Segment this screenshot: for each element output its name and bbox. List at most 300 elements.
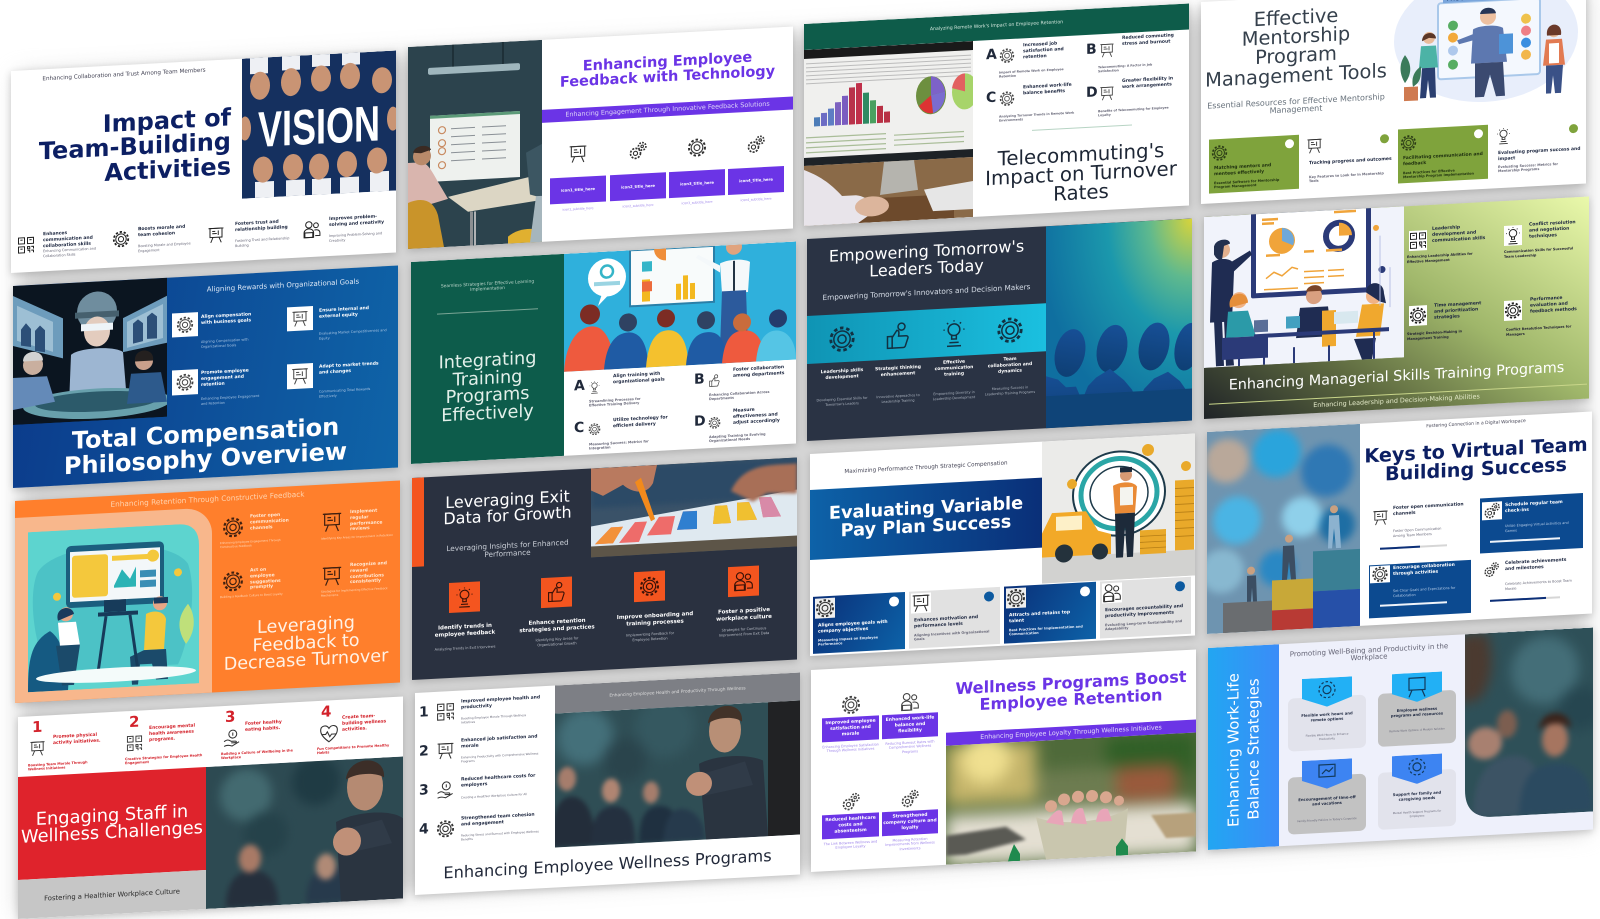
letter: C — [986, 90, 996, 106]
letter: B — [1086, 41, 1097, 58]
title: Impact of Team-Building Activities — [39, 103, 231, 187]
sub: Communication Skills for Successful Team Leadership — [1504, 246, 1573, 259]
sub: Adapting Training to Evolving Organizational Needs — [709, 432, 766, 444]
label box: Reduced healthcare costs and absenteeism — [825, 816, 876, 834]
photo: man pointing — [206, 756, 403, 909]
label box — [882, 809, 938, 836]
title: Leadership development and communication skills — [1432, 225, 1485, 243]
item 4 — [321, 560, 400, 601]
letter: C — [574, 420, 584, 436]
item text: Improves problem-solving and creativity — [329, 214, 384, 228]
icon — [588, 379, 601, 396]
left green panel — [411, 254, 564, 464]
label box: icon3_title_here — [680, 180, 714, 187]
subtitle: Aligning Rewards with Organizational Goals — [207, 278, 359, 294]
illustration: feedback on monitor — [28, 523, 199, 692]
benefit item: morale — [112, 224, 185, 248]
icon — [436, 741, 455, 761]
title: Effective communication training — [935, 360, 973, 377]
icon — [436, 780, 455, 800]
item 2 — [610, 142, 666, 209]
item 1 — [172, 312, 251, 349]
red title panel: Engaging Staff in Wellness Challenges — [21, 801, 203, 847]
title: Schedule regular team check-ins — [1505, 500, 1563, 514]
subtitle: Promoting Well-Being and Productivity in the Workplace — [1290, 641, 1448, 663]
title: Encourage mental health awareness programs. — [149, 724, 195, 743]
illustration: presenter and audience — [564, 242, 796, 372]
icon — [1504, 300, 1522, 321]
title: Time management and prioritization strategies — [1434, 301, 1481, 320]
sub: Flexible Work Hours to Enhance Productivity — [1306, 732, 1348, 741]
white icon box — [287, 363, 313, 389]
item B — [1086, 33, 1174, 74]
grey footer: Fostering a Healthier Workplace Culture — [44, 887, 180, 903]
label box: Enhanced work-life balance and flexibility — [886, 715, 934, 734]
icon — [1504, 225, 1522, 246]
photo: meeting room — [408, 40, 542, 249]
slide: Evaluating Variable Pay Plan Success — [810, 433, 1195, 656]
title: Foster a positive workplace culture — [716, 607, 772, 623]
title: Performance evaluation and feedback methods — [1530, 296, 1577, 314]
title: Improve onboarding and training processes — [617, 611, 693, 628]
card 4 — [1100, 577, 1191, 639]
item C — [571, 410, 681, 455]
sub: Measuring Impact on Employee Performance — [818, 635, 878, 647]
progress bar — [1380, 601, 1447, 606]
sub text: Telecommuting: A Factor in Job Satisfaction — [1098, 62, 1152, 74]
title: Reduced commuting stress and burnout — [1122, 33, 1174, 47]
title: Telecommuting's Impact on Turnover Rates — [985, 139, 1177, 206]
title: Foster collaboration among departments — [733, 365, 784, 379]
add dot — [1474, 129, 1483, 138]
label box: Improved employee satisfaction and morale — [825, 719, 876, 737]
slide: Effective Mentorship Program Management Tools — [1201, 0, 1586, 204]
slide: Total Compensation Philosophy Overview — [13, 265, 398, 488]
item text: Boosts morale and team cohesion — [138, 225, 185, 238]
sub: Measuring Success in Leadership Training Programs — [985, 385, 1035, 397]
card 2 — [909, 587, 1000, 649]
label box: Strengthened company culture and loyalty — [883, 813, 937, 831]
red title panel — [18, 767, 206, 880]
sub: Creative Strategies for Employee Health Engagement — [125, 753, 202, 766]
label box: icon1_title_here — [561, 186, 595, 193]
title: Foster open communication channels — [1393, 502, 1464, 517]
subtitle: Essential Resources for Effective Mentorship Management — [1207, 92, 1385, 115]
icon — [841, 791, 861, 812]
title: Facilitating communication and feedback — [1403, 152, 1483, 167]
icon: gears two — [748, 136, 765, 153]
letter: B — [694, 371, 705, 388]
sub: Utilize Engaging Virtual Activities and Games — [1505, 521, 1569, 533]
item 1 — [822, 693, 879, 760]
column 2 — [869, 321, 927, 416]
sub: Evaluating Market Competitiveness and Equity — [319, 328, 387, 341]
grey footer — [18, 870, 206, 919]
icon — [588, 421, 601, 438]
blue vertical title strip — [1208, 644, 1279, 850]
white icon box — [287, 306, 313, 331]
sub: Reducing Burnout Rates with Comprehensive Wellness Programs — [885, 739, 935, 754]
slide: Telecommuting's Impact on Turnover Rates — [804, 3, 1189, 226]
slide: Wellness Programs Boost Employee Retention — [811, 649, 1196, 872]
subtitle: Leveraging Insights for Enhanced Performance — [446, 538, 569, 559]
icon: gears — [630, 142, 647, 160]
title: Keys to Virtual Team Building Success — [1364, 433, 1588, 485]
benefit sub text: problem-solving: Improving Problem-Solving and Creativity — [329, 231, 382, 243]
sub: Analyzing Trends in Exit Interviews — [435, 645, 495, 652]
grey header — [555, 672, 800, 713]
sub: Evaluating Long-term Sustainability and Adaptability — [1105, 619, 1182, 632]
sub: Enhancing Employee Satisfaction Through Wellness Initiatives — [822, 742, 879, 753]
item 3 — [1407, 299, 1499, 344]
item 2 — [882, 690, 938, 757]
sub: Remote Work Options: A Modern Solution — [1389, 726, 1445, 733]
sub: Identifying Key Areas for Organizational Growth — [536, 636, 578, 647]
benefit 4 — [418, 811, 553, 850]
progress bar — [1490, 596, 1560, 601]
item A — [571, 368, 681, 413]
title: Conflict resolution and negotiation techniques — [1529, 220, 1576, 239]
slide: Enhancing Work-Life Balance Strategies — [1208, 627, 1593, 850]
add dot — [1080, 586, 1090, 597]
title: Support for family and caregiving needs — [1393, 790, 1441, 802]
title: Identify trends in employee feedback — [435, 623, 495, 639]
add dot — [1285, 139, 1294, 149]
letter: D — [1086, 84, 1098, 101]
slide: Impact of Team-Building Activities — [11, 50, 396, 273]
sub: Strategies for Implementing Effective Feedback Mechanisms — [321, 586, 388, 597]
icon: gear head — [688, 138, 706, 157]
number: 1 — [419, 704, 429, 721]
sub text: Best Practices for Effective Mentorship Program Implementation — [1403, 168, 1474, 180]
header band: Analyzing Remote Work's Impact on Employee Retention — [930, 20, 1063, 32]
step 4 — [315, 699, 403, 758]
sub: Aligning Incentives with Organizational Goals — [914, 629, 989, 642]
blue title band — [810, 478, 1042, 560]
title: Enhancing Managerial Skills Training Programs — [1229, 360, 1564, 394]
sub: Implementing Feedback for Employee Retention — [626, 631, 674, 642]
icon — [1409, 305, 1427, 326]
icon badge — [1392, 754, 1442, 785]
title: Leveraging Feedback to Decrease Turnover — [224, 613, 388, 675]
icon — [1497, 128, 1510, 144]
item 3 — [172, 368, 260, 406]
caption: icon2_subtitle_here — [623, 203, 653, 209]
photo: VISION with fists — [242, 50, 396, 199]
sub: Conflict Resolution Techniques for Managers — [1506, 324, 1571, 337]
title: Celebrate achievements and milestones — [1505, 558, 1566, 572]
title: Align compensation with business goals — [201, 312, 251, 326]
card 1 — [813, 592, 905, 654]
white icon box — [1102, 582, 1122, 603]
card body — [1378, 769, 1456, 830]
title: Wellness Programs Boost Employee Retention — [956, 667, 1186, 714]
add dot — [889, 596, 899, 607]
photo: paper people on desk — [946, 732, 1196, 865]
card 3 — [1288, 758, 1366, 835]
title: Aligns employee goals with company objectives — [818, 620, 888, 634]
title: Greater flexibility in work arrangements — [1122, 76, 1173, 90]
subtitle: Seamless Strategies for Effective Learning Implementation — [441, 279, 534, 293]
icon — [1482, 501, 1502, 520]
subtitle: Enhancing Leadership and Decision-Making Abilities — [1313, 392, 1480, 409]
white icon box — [815, 598, 835, 619]
item D — [1086, 76, 1173, 118]
sub: Enhancing Leadership Abilities for Effective Management — [1407, 252, 1473, 264]
benefit 2 — [418, 733, 553, 772]
card 2 — [1480, 493, 1583, 553]
subtitle: Fostering Connection in a Digital Workspace — [1426, 419, 1526, 429]
title: Foster healthy eating habits. — [245, 720, 282, 733]
sub text: Evaluating Success: Metrics for Mentorship Programs — [1498, 162, 1558, 174]
title: Enhancing Employee Wellness Programs — [443, 846, 772, 882]
icon badge — [1302, 758, 1352, 790]
title: Integrating Training Programs Effectively — [439, 348, 536, 426]
card 2 — [1378, 671, 1456, 747]
card 1 — [1288, 676, 1366, 752]
sub: Identifying Key Areas for Improvement in Retention — [321, 533, 393, 541]
subtitle: Maximizing Performance Through Strategic Compensation — [844, 460, 1008, 475]
title: Measure effectiveness and adjust accordingly — [733, 408, 780, 425]
title: Promote employee engagement and retention — [201, 368, 249, 388]
number: 4 — [321, 702, 331, 721]
slide: Leveraging Exit Data for Growth — [412, 457, 797, 680]
title: Leveraging Exit Data for Growth — [443, 487, 572, 528]
item D — [691, 403, 796, 449]
sub: Empowering Diversity in Leadership Development — [933, 390, 975, 401]
icon — [1483, 560, 1500, 579]
title: Enhance retention strategies and practices — [519, 618, 595, 634]
title: Adapt to market trends and changes — [319, 362, 379, 375]
photo: figures on blocks with bokeh — [1207, 424, 1360, 634]
sub: Developing Essential Skills for Tomorrow's Leaders — [816, 396, 868, 407]
title: Strengthened team cohesion and engagement — [461, 813, 535, 827]
label box — [822, 715, 879, 742]
white icon box — [172, 312, 198, 338]
teal band — [807, 303, 1046, 364]
title: Encourage collaboration through activities — [1393, 563, 1455, 577]
benefit 3 — [418, 772, 553, 811]
card 1 — [1209, 135, 1299, 194]
icon — [222, 516, 244, 539]
sub: Building a Culture of Wellbeing in the Workplace — [221, 748, 293, 761]
sub: Strategic Decision-Making in Management Training — [1407, 329, 1462, 341]
column 3 — [925, 318, 983, 413]
icon square — [449, 581, 480, 613]
title: Reduced healthcare costs for employers — [461, 774, 535, 788]
icon — [708, 372, 721, 389]
step 3 — [219, 704, 314, 763]
sub: Boosting Team Morale Through Wellness Initiatives — [28, 760, 88, 772]
icon — [1000, 92, 1014, 106]
item 4 — [728, 136, 784, 202]
icon badge — [1392, 672, 1442, 703]
icon — [1212, 145, 1228, 161]
icon square — [541, 576, 572, 608]
divider — [1032, 125, 1132, 131]
title: Enhancing Employee Feedback with Technology — [560, 50, 775, 90]
sub text: Benefits of Telecommuting for Employee Loyalty — [1098, 106, 1169, 118]
card 3 — [1369, 560, 1471, 618]
title: Recognize and reward contributions consistently — [350, 561, 387, 586]
title: Utilize technology for efficient delivery — [613, 415, 668, 429]
item text: Fosters trust and relationship building — [235, 220, 288, 233]
icon — [1100, 44, 1114, 58]
letter: A — [574, 378, 585, 394]
sub: Enhancing Productivity with Comprehensive Wellness Programs — [461, 751, 538, 764]
card 4 — [1497, 124, 1580, 174]
progress bar — [1490, 537, 1560, 542]
item 4 — [1504, 294, 1589, 339]
item 2 — [321, 506, 400, 547]
sub: Strategies for Continuous Improvement From Exit Data — [719, 626, 769, 638]
card 4 — [1480, 554, 1583, 612]
label box — [550, 175, 606, 204]
icon — [900, 691, 920, 712]
card 4 — [1378, 753, 1456, 830]
step 2 — [123, 709, 218, 768]
title: Encourages accountability and productivity improvements — [1105, 604, 1183, 619]
label box — [882, 712, 938, 739]
card 2 — [1307, 134, 1392, 184]
label box — [610, 172, 666, 201]
title: Tracking progress and outcomes — [1309, 157, 1392, 166]
icon — [1409, 230, 1427, 251]
sub: Reducing Stress and Burnout with Employee Wellness Benefits — [461, 829, 539, 842]
caption: icon1_subtitle_here — [563, 206, 593, 212]
sub: Innovative Approaches to Leadership Training — [876, 393, 920, 404]
item 4 — [882, 787, 938, 854]
title: Enhances motivation and performance levels — [914, 615, 978, 629]
sub: Aligning Compensation with Organizational Goals — [201, 337, 249, 349]
title: Attracts and retains top talent — [1009, 610, 1070, 624]
benefit sub text: morale: Boosting Morale and Employee Engagement — [138, 241, 191, 253]
number: 1 — [32, 718, 42, 736]
title: Strategic thinking enhancement — [875, 365, 921, 378]
item 1 — [220, 511, 315, 552]
icon — [708, 414, 721, 431]
icon — [1100, 86, 1114, 100]
number: 3 — [225, 707, 235, 726]
sub: Set Clear Goals and Expectations for Collaboration — [1393, 586, 1455, 598]
purple subtitle band: Enhancing Employee Loyalty Through Wellness Initiatives — [980, 724, 1162, 741]
sub text: Analyzing Turnover Trends in Remote Work Environments — [999, 111, 1074, 123]
label box — [669, 169, 725, 198]
column 3 — [619, 570, 681, 649]
icon — [126, 733, 143, 753]
title: Create team-building wellness activities. — [342, 714, 386, 732]
slide: Enhancing Managerial Skills Training Programs — [1204, 196, 1589, 419]
icon — [436, 702, 455, 722]
item C — [986, 82, 1074, 123]
sub: Celebrate Achievements to Boost Team Morale — [1505, 579, 1572, 591]
slide: Keys to Virtual Team Building Success — [1207, 411, 1592, 634]
subtitle: Enhancing Collaboration and Trust Among Team Members — [42, 68, 206, 82]
photo: blurred man pointing — [1465, 628, 1593, 817]
icon: qr board — [18, 236, 34, 254]
column 2 — [526, 576, 588, 655]
purple subtitle band — [542, 96, 793, 123]
column 1 — [813, 324, 871, 419]
benefit item: problem-solving — [304, 214, 384, 238]
item 3 — [220, 565, 315, 606]
icon — [828, 324, 856, 354]
column 1 — [434, 581, 496, 660]
sub: Foster Open Communication Among Team Members — [1393, 527, 1441, 538]
icon — [321, 511, 343, 534]
sub text: Impact of Remote Work on Employee Retention — [999, 67, 1064, 79]
column 4 — [713, 565, 775, 644]
white icon box — [911, 593, 931, 614]
sub: Creating a Healthier Workplace Culture for All — [461, 792, 527, 800]
icon — [1372, 508, 1389, 527]
title: Total Compensation Philosophy Overview — [64, 413, 347, 480]
sub: Mental Health Support Programs for Employees — [1393, 809, 1441, 818]
caption: icon3_subtitle_here — [682, 200, 712, 205]
sub: Enhancing Employee Engagement and Retention — [201, 394, 259, 406]
icon: gear — [112, 231, 130, 248]
caption: icon4_subtitle_here — [741, 197, 771, 202]
header band — [804, 3, 1189, 50]
sub text: Key Features to Look for in Mentorship Tools — [1309, 171, 1384, 184]
card 3 — [1004, 582, 1096, 644]
title: Increased job satisfaction and retention — [1023, 42, 1064, 60]
icon — [1000, 48, 1014, 63]
sub: The Link Between Wellness and Employee Loyalty — [824, 839, 877, 850]
purple subtitle band: Enhancing Engagement Through Innovative Feedback Solutions — [565, 100, 770, 119]
photo: man pointing — [555, 700, 800, 847]
sub: Family-Friendly Policies in Today's Corporate — [1297, 816, 1357, 823]
sub: Best Practices for Implementation and Communication — [1009, 624, 1083, 637]
title: Encouragement of time-off and vacations — [1298, 794, 1356, 806]
title: Foster open communication channels — [250, 513, 289, 531]
icon — [318, 723, 340, 744]
item 3 — [822, 790, 879, 857]
icon — [884, 321, 912, 351]
icon: presentation board — [208, 228, 224, 243]
title: Ensure internal and external equity — [319, 306, 369, 319]
title: Leadership skills development — [821, 368, 863, 381]
label box — [728, 166, 784, 195]
sub: Measuring Retention Improvements from Wellness Investments — [885, 837, 935, 851]
card body — [1378, 690, 1456, 747]
sub: Boosting Employee Morale Through Wellness Initiatives — [461, 713, 526, 725]
title: Team collaboration and dynamics — [988, 357, 1032, 374]
letter: D — [694, 413, 706, 430]
benefit sub text: trust: Fostering Trust and Relationship Building — [235, 236, 289, 248]
icon — [940, 318, 968, 348]
number: 2 — [129, 713, 139, 731]
label box — [822, 812, 879, 839]
sub: Measuring Success: Metrics for Integration — [589, 439, 649, 451]
progress bar — [1380, 544, 1447, 549]
title: Employee wellness programs and resources — [1391, 706, 1443, 718]
sub: Enhancing Collaboration Across Departments — [709, 390, 770, 402]
item text: Enhances communication and collaboration skills — [43, 231, 93, 249]
item 2 — [1504, 218, 1589, 263]
illustration: team meeting with dashboard — [1204, 206, 1404, 368]
sub text: Essential Software for Mentorship Program Management — [1214, 178, 1279, 190]
photo: woman with helmet and screens — [13, 278, 167, 425]
slide: Enhancing Employee Wellness Programs — [415, 672, 800, 895]
item 2 — [287, 306, 387, 341]
sub: Fun Competitions to Promote Healthy Habits — [317, 743, 389, 755]
slide: Enhancing Employee Feedback with Technology — [408, 26, 793, 249]
number: 2 — [419, 743, 429, 760]
icon — [1370, 565, 1390, 583]
item 1 — [550, 146, 606, 212]
sub: Building a Feedback Culture to Boost Loyalty — [220, 592, 283, 599]
